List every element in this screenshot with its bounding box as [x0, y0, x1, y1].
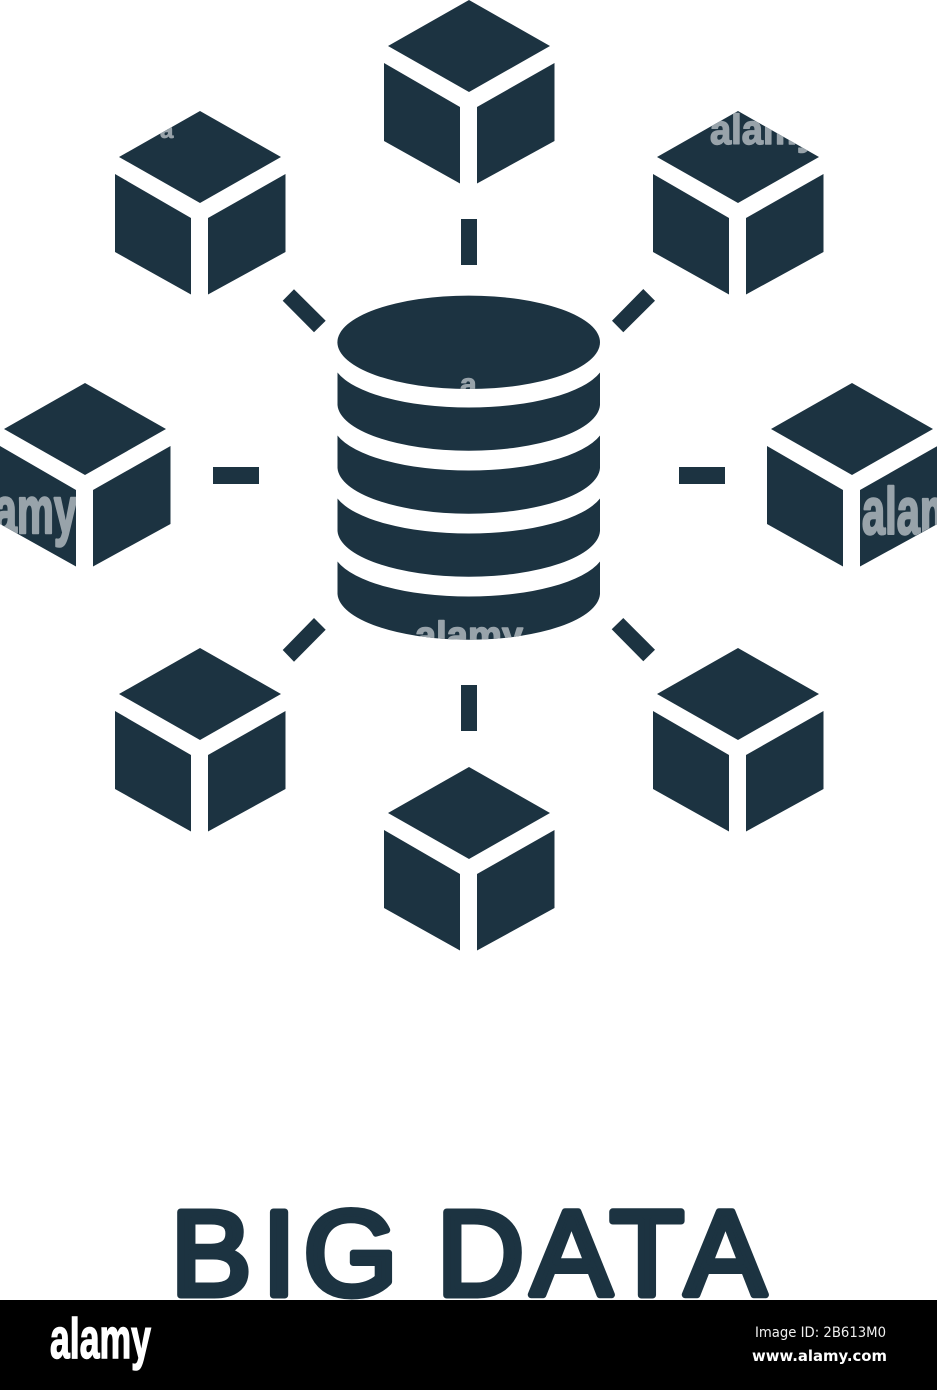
- watermark: cylinder bottom: alamy: [415, 615, 523, 657]
- image id: Image ID: 2B613M0: [755, 1325, 886, 1341]
- icon: cube lower left: [115, 648, 286, 832]
- connector: right: [679, 467, 725, 484]
- watermark: upper left cube: a: [160, 117, 174, 144]
- connector: upper left: [283, 289, 326, 332]
- icon: cube bottom: [384, 767, 554, 950]
- icon: cube left: [0, 383, 170, 566]
- watermark: upper right cube: alamy: [710, 106, 819, 153]
- title: BIG DATA: [0, 1185, 766, 1321]
- icon: cube top: [384, 0, 554, 184]
- connector: lower right: [612, 618, 655, 661]
- footer logo: alamy: [50, 1307, 151, 1371]
- icon: cube upper left: [115, 111, 286, 294]
- connector: bottom: [461, 685, 477, 731]
- icon: cube upper right: [653, 111, 824, 294]
- connector: upper right: [612, 289, 655, 332]
- watermark: cylinder top: a: [460, 368, 477, 401]
- connector: left: [213, 467, 259, 484]
- icon: cube right: [767, 383, 937, 566]
- connector: lower left: [283, 618, 326, 662]
- connector: top: [461, 219, 477, 265]
- footer bar: [0, 1300, 937, 1390]
- website: www.alamy.com: [752, 1347, 887, 1365]
- icon: database cylinder: [337, 296, 600, 640]
- icon: cube lower right: [653, 648, 824, 832]
